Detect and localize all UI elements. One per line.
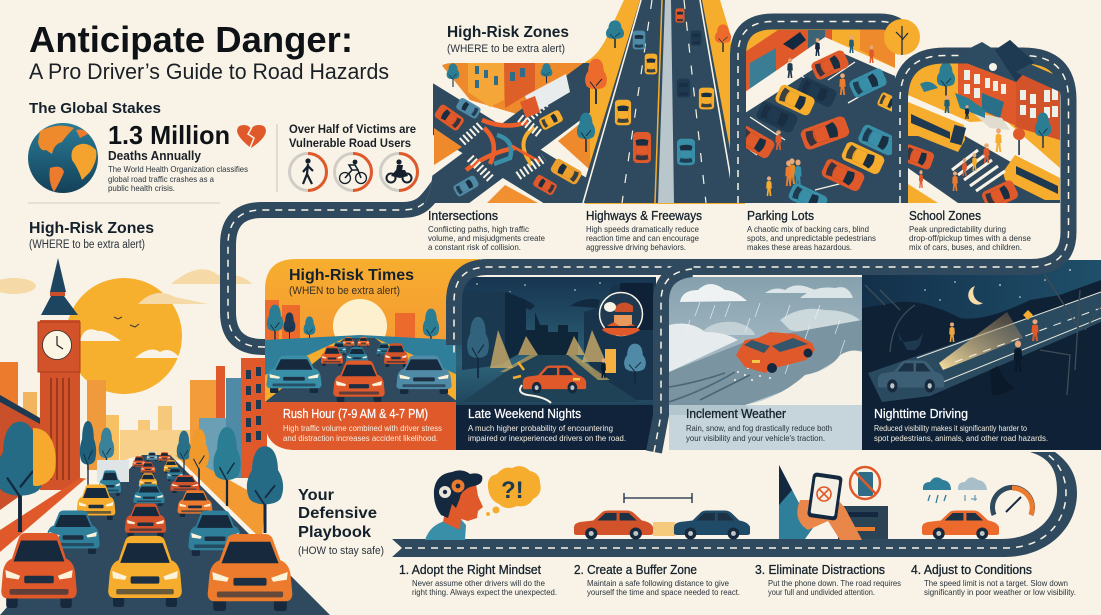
text: vulnerable road users: Over Half of Victims are (289, 124, 416, 136)
icon: thought bubble: ?! (501, 477, 524, 504)
road: playbook (392, 452, 1077, 557)
icon: no phone (850, 467, 880, 499)
text: late weekend nights (468, 406, 626, 443)
text: late weekend nights: impaired or inexperienced drivers on the road. (468, 433, 626, 443)
text: step 1: Never assume other drivers will do the (412, 578, 545, 588)
stat: 1.3 million deaths (108, 120, 248, 193)
text: step 4 (911, 562, 1076, 597)
text: inclement weather: your visibility and your vehicle's traction. (686, 433, 825, 443)
text: vulnerable road users (289, 124, 416, 150)
panel: high-risk zones scenes (415, 0, 1060, 216)
text: step 1: right thing. Always expect the unexpected. (412, 587, 557, 597)
text: nighttime driving: Nighttime Driving (874, 406, 968, 421)
heading: defensive playbook (298, 487, 384, 557)
text: intersections: a constant risk of collision. (428, 242, 521, 252)
title: A Pro Driver’s Guide to Road Hazards (29, 59, 389, 84)
icon: pedestrian ring (290, 154, 326, 190)
scene: intersection (425, 63, 590, 203)
text: nighttime driving: spot pedestrians, animals, and other road hazards. (874, 433, 1048, 443)
illustration: city traffic with clock tower (0, 258, 330, 615)
text: step 3: your full and undivided attention. (768, 587, 875, 597)
text: school zones: mix of cars, buses, and children. (909, 242, 1022, 252)
stat: 1.3 million deaths: Deaths Annually (108, 149, 201, 163)
text: highways (586, 208, 702, 252)
icon: inset drowsy driver (600, 292, 642, 336)
scene: highway (578, 0, 740, 203)
text: inclement weather (686, 406, 832, 443)
text: intersections: volume, and misjudgments create (428, 233, 545, 243)
heading: defensive playbook: Defensive (298, 505, 377, 522)
text: step 4: significantly in poor weather or low visibility. (924, 587, 1076, 597)
heading: high-risk zones left: High-Risk Zones (29, 220, 154, 237)
text: school zones: drop-off/pickup times with a dense (909, 233, 1031, 243)
heading: high-risk zones left: (WHERE to be extra alert) (29, 239, 145, 251)
icon: roadside trees (577, 20, 731, 152)
text: step 2: 2. Create a Buffer Zone (574, 562, 697, 577)
text: step 3: 3. Eliminate Distractions (755, 562, 885, 577)
scene: highway backdrop (585, 0, 745, 204)
text: inclement weather: Inclement Weather (686, 406, 787, 421)
text: highways: Highways & Freeways (586, 208, 702, 223)
text: rush hour: High traffic volume combined with driver stress (283, 423, 442, 433)
text: rush hour (283, 406, 442, 443)
text: nighttime driving (874, 406, 1048, 443)
text: parking lots: Parking Lots (747, 208, 814, 223)
title (29, 19, 389, 84)
heading: high-risk times: High-Risk Times (289, 267, 414, 284)
panel: rush hour (265, 259, 480, 450)
heading: high-risk times (289, 267, 414, 297)
text: late weekend nights: Late Weekend Nights (468, 406, 581, 421)
icon: red car (574, 510, 653, 540)
illustration: mindset head (425, 470, 483, 540)
panel: late weekend nights (456, 277, 656, 450)
icon: speed gauge (992, 487, 1032, 515)
heading: high-risk zones top (447, 24, 569, 55)
road: connector from zones to times (228, 183, 440, 347)
stat: 1.3 million deaths: 1.3 Million (108, 120, 230, 150)
road: times serpentine (454, 62, 1068, 358)
divider (28, 202, 220, 204)
icon: following distance bracket (624, 493, 692, 503)
text: vulnerable road users: Vulnerable Road Users (289, 138, 411, 150)
scene: school zone (908, 64, 1060, 203)
icon: tree on amber disc (884, 19, 920, 55)
icon: thought bubble (486, 466, 541, 516)
panel: nighttime driving (862, 260, 1101, 450)
text: school zones: Peak unpredictability during (909, 224, 1006, 234)
heading: high-risk zones top: High-Risk Zones (447, 24, 569, 41)
text: intersections: Intersections (428, 208, 498, 223)
text: late weekend nights: A much higher probability of encountering (468, 423, 613, 433)
stat: 1.3 million deaths: The World Health Organization classifies (108, 164, 248, 174)
icon: orange car (922, 510, 999, 540)
icon: globe (28, 123, 98, 193)
text: intersections (428, 208, 545, 252)
scene: parking lot (746, 30, 895, 203)
heading: high-risk zones top: (WHERE to be extra alert) (447, 43, 565, 55)
heading: high-risk zones left (29, 220, 154, 251)
text: intersections: Conflicting paths, high traffic (428, 224, 530, 234)
text: highways: aggressive driving behaviors. (586, 242, 686, 252)
road: school zone frame (900, 56, 1068, 203)
text: rush hour: and distraction increases accident likelihood. (283, 433, 438, 443)
text: parking lots: A chaotic mix of backing cars, blind (747, 224, 869, 234)
icon: blue car (674, 510, 750, 540)
stat: 1.3 million deaths: public health crisis. (108, 183, 175, 193)
heading: defensive playbook: (HOW to stay safe) (298, 545, 384, 557)
text: step 2 (574, 562, 740, 597)
text: step 3: Put the phone down. The road requires (768, 578, 901, 588)
text: step 4: 4. Adjust to Conditions (911, 562, 1032, 577)
text: highways: reaction time and can encourage (586, 233, 699, 243)
text: nighttime driving: Reduced visibility makes it significantly harder to (874, 423, 1027, 433)
stat: 1.3 million deaths: global road traffic crashes as a (108, 174, 214, 184)
text: step 3 (755, 562, 901, 597)
divider (276, 124, 278, 192)
text: step 2: Maintain a safe following distance to give (587, 578, 729, 588)
panel: high-risk times (265, 130, 1101, 454)
text: step 1 (399, 562, 557, 597)
text: parking lots (747, 208, 876, 252)
road: inner branch between panels (654, 269, 692, 452)
heading: defensive playbook: Playbook (298, 524, 371, 541)
text: step 4: The speed limit is not a target. Slow down (924, 578, 1068, 588)
text: step 1: 1. Adopt the Right Mindset (399, 562, 541, 577)
text: highways: High speeds dramatically reduce (586, 224, 699, 234)
text: parking lots: makes these areas hazardous. (747, 242, 852, 252)
icon: gap glow (653, 522, 675, 536)
heading: high-risk times: (WHEN to be extra alert) (289, 285, 400, 297)
panel: inclement weather (669, 277, 862, 450)
icon: motorcycle ring (380, 154, 418, 190)
icon: weather clouds (923, 477, 987, 503)
title: Anticipate Danger: (29, 19, 353, 60)
heading: defensive playbook: Your (298, 487, 334, 504)
icon: broken heart (237, 125, 266, 148)
text: rush hour: Rush Hour (7-9 AM & 4-7 PM) (283, 406, 428, 421)
heading: the global stakes: The Global Stakes (29, 100, 161, 117)
icon: school roof over road (958, 40, 1062, 92)
text: parking lots: spots, and unpredictable pedestrians (747, 233, 876, 243)
text: step 2: yourself the time and space needed to react. (587, 587, 740, 597)
text: inclement weather: Rain, snow, and fog drastically reduce both (686, 423, 832, 433)
text: school zones (909, 208, 1031, 252)
text: school zones: School Zones (909, 208, 981, 223)
road: parking lot frame (738, 22, 905, 203)
illustration: phone and dashboard (779, 465, 888, 540)
icon: bicycle ring (334, 154, 372, 190)
